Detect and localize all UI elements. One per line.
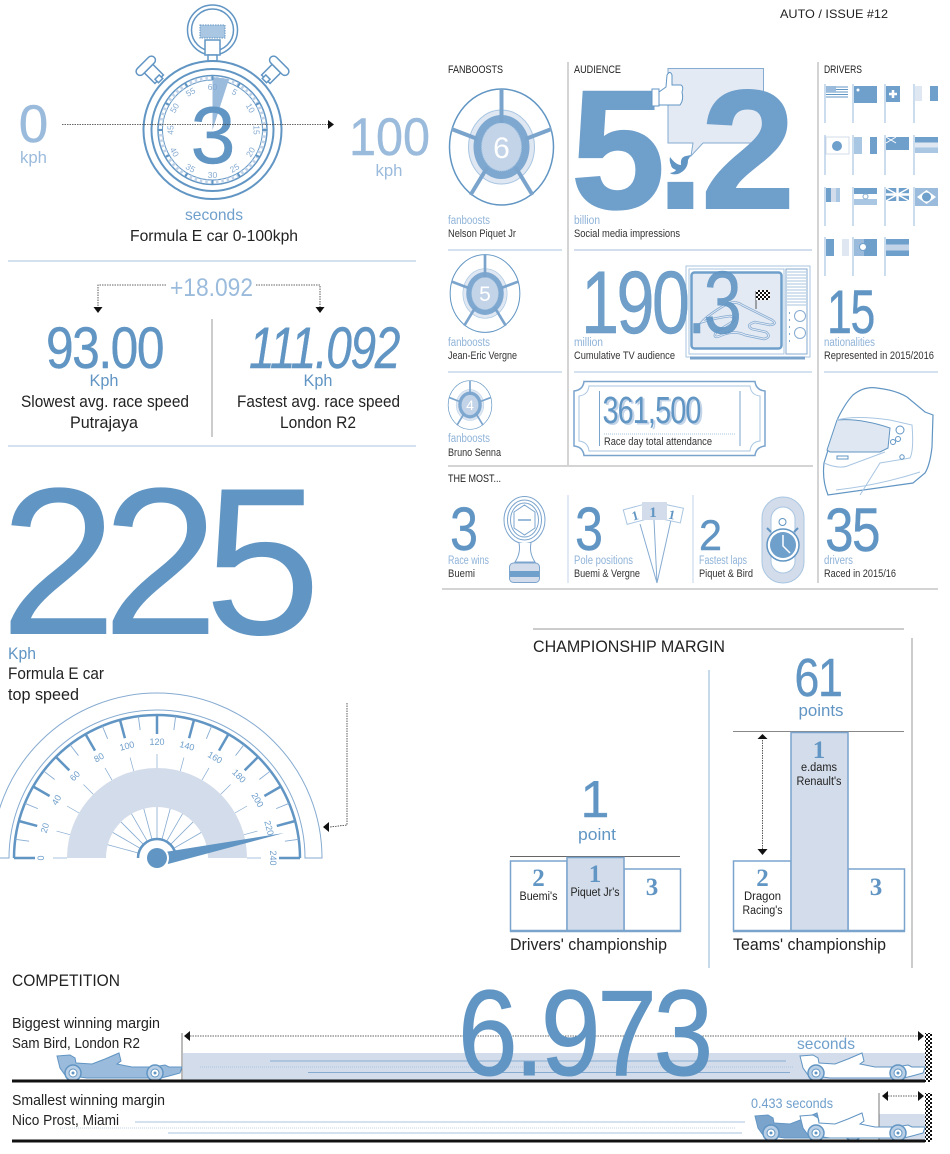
text: Nelson Piquet Jr: fanboosts <box>448 215 490 227</box>
speedometer: 100 <box>118 739 136 753</box>
speedometer: 200 <box>249 791 266 809</box>
end speed: kph <box>376 161 402 180</box>
speedometer: 80 <box>92 751 106 764</box>
TV audience number: 190.3 <box>581 252 739 352</box>
text: Nelson Piquet Jr: Nelson Piquet Jr <box>448 228 516 240</box>
text: Jean-Eric Vergne: Jean-Eric Vergne <box>448 350 517 362</box>
podium: drivers: 2 <box>532 865 545 892</box>
text: social media: Social media impressions <box>574 228 680 240</box>
stopwatch dial numbers: 30 <box>208 170 217 180</box>
pole positions: 3 <box>575 495 603 563</box>
icon: pole flags: 1 <box>667 506 677 523</box>
icon: pole flags: 1 <box>649 505 657 521</box>
top speed caption: Kph <box>8 644 36 663</box>
speedometer <box>0 693 322 870</box>
podium: teams <box>733 732 905 954</box>
ticket: race attendance: 361,500 <box>604 392 702 434</box>
social media number: 5.2 <box>571 55 795 244</box>
text: Jean-Eric Vergne: fanboosts <box>448 337 490 349</box>
podium: teams: Renault's <box>796 776 842 788</box>
icon: wheel Bruno Senna <box>448 381 492 429</box>
flag: France <box>826 239 849 256</box>
text: TV audience <box>574 337 675 362</box>
arrow: zero to hundred <box>62 120 334 129</box>
nationalities: 15 <box>827 278 874 346</box>
panel: race speed comparison <box>21 274 400 437</box>
flag: Japan <box>826 137 849 154</box>
podium: drivers: 1 <box>589 861 601 888</box>
drivers raced: Raced in 2015/16 <box>824 568 896 580</box>
race wins: Race wins <box>448 555 489 567</box>
podium: drivers: Piquet Jr's <box>570 887 620 899</box>
smallest margin label: 0.433 seconds <box>751 1095 833 1111</box>
panel: championship margin <box>510 629 912 968</box>
podium: teams: 1 <box>813 737 825 764</box>
heading: drivers: DRIVERS <box>824 64 862 76</box>
caption <box>130 207 298 245</box>
podium: teams: Racing's <box>742 905 783 917</box>
icon: trophy <box>504 496 545 582</box>
icon: television <box>686 266 810 360</box>
teams margin: points <box>798 701 844 720</box>
ticket: race attendance: 361,500 <box>602 390 700 432</box>
heading: the most: THE MOST... <box>448 473 501 485</box>
fastest race speed: Fastest avg. race speed <box>237 393 400 411</box>
speedometer: 220 <box>262 819 276 837</box>
flag: United Kingdom <box>886 188 909 201</box>
drivers raced: drivers <box>824 555 853 567</box>
speedometer: 120 <box>149 737 165 747</box>
heading: competition: COMPETITION <box>12 972 120 990</box>
podium: drivers: Buemi's <box>520 891 558 903</box>
nationalities: nationalities <box>824 337 875 349</box>
stopwatch dial numbers: 25 <box>228 161 241 175</box>
icon: car white <box>800 1113 925 1141</box>
end speed: 100 <box>349 108 430 167</box>
speedometer: 180 <box>230 767 248 785</box>
flag: Switzerland <box>886 86 900 102</box>
top speed caption: Formula E car <box>8 665 104 683</box>
stopwatch dial numbers: 60 <box>208 82 217 92</box>
text: Bruno Senna: Bruno Senna <box>448 447 502 459</box>
icon: wheel Nelson Piquet Jr <box>450 89 554 205</box>
text: Bruno Senna <box>448 433 502 459</box>
fastest race speed <box>237 316 400 432</box>
track: biggest margin <box>182 1031 932 1082</box>
stopwatch dial numbers: 15 <box>252 125 262 135</box>
ticket: race attendance <box>574 382 765 456</box>
text: biggest margin: Biggest winning margin <box>12 1016 160 1032</box>
icon: speech bubble <box>668 68 764 156</box>
start speed: kph <box>20 148 47 167</box>
heading: audience: AUDIENCE <box>574 64 621 76</box>
stopwatch dial numbers: 35 <box>184 161 197 175</box>
drivers raced: 35 <box>825 496 879 564</box>
flag: Brazil <box>915 188 938 206</box>
icon: thumbs up <box>652 72 683 106</box>
flag: India <box>854 188 877 205</box>
podium: teams: e.dams <box>801 762 837 774</box>
panel: competition <box>12 965 932 1142</box>
speed difference: +18.092 <box>170 274 253 302</box>
flag: Portugal <box>854 239 877 256</box>
stopwatch seconds value: 3 <box>190 91 236 181</box>
top speed caption <box>8 644 104 704</box>
flag: China <box>854 86 877 103</box>
slowest race speed: Slowest avg. race speed <box>21 393 189 411</box>
text: TV audience: Cumulative TV audience <box>574 350 675 362</box>
stopwatch dial numbers: 20 <box>244 145 257 159</box>
track: smallest margin <box>60 1091 932 1142</box>
slowest race speed: Kph <box>90 371 118 390</box>
flag: USA <box>826 86 848 99</box>
podium: drivers: Drivers' championship <box>510 936 667 954</box>
panel: the most <box>448 473 804 583</box>
slowest race speed: Putrajaya <box>70 414 139 432</box>
teams margin: 61 <box>794 648 842 708</box>
stopwatch dial numbers: 5 <box>230 86 239 98</box>
stopwatch dial numbers: 45 <box>166 125 176 135</box>
panel: drivers <box>824 64 938 580</box>
fastest laps: 2 <box>699 512 722 560</box>
text: social media: billion <box>574 215 600 227</box>
flag: Italy <box>915 86 938 101</box>
slowest race speed <box>21 316 189 432</box>
speedometer: 0 <box>36 855 46 861</box>
pole positions: Pole positions <box>574 555 633 567</box>
flag: Netherlands <box>886 239 909 256</box>
text: biggest margin: Sam Bird, London R2 <box>12 1036 140 1052</box>
nationalities: Represented in 2015/2016 <box>824 350 934 362</box>
drivers margin: point <box>578 825 616 844</box>
ticket: race attendance: Race day total attendance <box>604 436 712 448</box>
caption: seconds <box>185 207 243 224</box>
stopwatch dial numbers: 50 <box>168 101 181 115</box>
icon: stopwatch <box>134 5 291 199</box>
nationalities <box>824 278 934 362</box>
podium: drivers <box>510 856 681 954</box>
fastest laps: Fastest laps <box>699 555 747 567</box>
speedometer: 160 <box>206 749 224 766</box>
icon: car blue <box>57 1053 182 1081</box>
podium: drivers: 3 <box>646 874 658 901</box>
icon: pole flags: 1 <box>630 507 640 524</box>
fastest laps <box>699 512 753 580</box>
arrow: to slowest <box>94 285 166 313</box>
caption: Formula E car 0-100kph <box>130 228 298 245</box>
icon: wheel Nelson Piquet Jr: 6 <box>493 132 510 165</box>
text: Nelson Piquet Jr <box>448 215 516 240</box>
race wins <box>448 495 489 580</box>
panel: fanboosts <box>448 64 562 459</box>
arrow: teams margin <box>758 734 768 855</box>
icon: helmet <box>824 388 933 495</box>
podium: teams: 3 <box>870 874 882 901</box>
flag poles <box>825 84 914 276</box>
icon: wheel Jean-Eric Vergne <box>450 255 520 332</box>
podium: teams: Teams' championship <box>733 936 886 954</box>
icon: car dark <box>755 1113 880 1141</box>
icon: track and stopwatch <box>762 497 804 583</box>
top speed caption: top speed <box>8 686 79 704</box>
biggest margin number: 6.973 <box>458 965 710 1101</box>
text: biggest margin <box>12 1016 160 1052</box>
icon: car white <box>800 1053 925 1081</box>
stopwatch dial numbers: 40 <box>168 145 181 159</box>
slowest race speed: 93.00 <box>46 316 163 381</box>
flag: Belgium <box>826 188 840 202</box>
flag: Australia <box>886 137 909 150</box>
speedometer: 140 <box>178 739 196 753</box>
heading: fanboosts: FANBOOSTS <box>448 64 503 76</box>
drivers margin <box>578 771 616 844</box>
start speed: 0 <box>19 95 48 154</box>
podium: teams: Dragon <box>744 891 781 903</box>
icon: twitter bird <box>670 155 691 174</box>
fastest race speed: Kph <box>304 371 332 390</box>
text: smallest margin: Nico Prost, Miami <box>12 1113 119 1129</box>
text: social media <box>574 215 680 240</box>
seconds label: seconds <box>797 1036 855 1053</box>
arrow: to fastest <box>256 285 324 313</box>
stopwatch dial numbers: 10 <box>244 101 257 115</box>
stopwatch dial numbers <box>166 82 262 180</box>
speedometer: 20 <box>39 822 51 834</box>
race wins: Buemi <box>448 568 475 580</box>
text: Bruno Senna: fanboosts <box>448 433 490 445</box>
pole positions: Buemi & Vergne <box>574 568 640 580</box>
issue label: AUTO / ISSUE #12 <box>780 7 888 21</box>
panel: zero to 100 stopwatch <box>19 5 430 245</box>
stopwatch dial numbers: 55 <box>184 85 197 99</box>
fastest race speed: 111.092 <box>249 316 400 381</box>
text: smallest margin <box>12 1093 165 1129</box>
top speed number: 225 <box>0 444 312 679</box>
arrow: top speed pointer <box>323 703 347 832</box>
speedometer: 60 <box>68 769 82 783</box>
fastest race speed: London R2 <box>280 414 356 432</box>
race wins: 3 <box>450 495 478 563</box>
icon: wheel Bruno Senna: 4 <box>466 397 474 413</box>
text: TV audience: million <box>574 337 603 349</box>
icon: pole flags <box>623 502 683 583</box>
text: smallest margin: Smallest winning margin <box>12 1093 165 1109</box>
heading: championship margin: CHAMPIONSHIP MARGIN <box>533 638 725 656</box>
panel: top speed <box>0 444 347 870</box>
flag: Argentina <box>915 137 938 153</box>
panel: audience <box>571 55 812 456</box>
fastest laps: Piquet & Bird <box>699 568 753 580</box>
pole positions <box>574 495 640 580</box>
speedometer: 240 <box>268 850 278 866</box>
speedometer: 40 <box>50 793 63 807</box>
podium: teams: 2 <box>756 865 769 892</box>
text: Jean-Eric Vergne <box>448 337 517 362</box>
flag: France <box>854 137 877 154</box>
drivers margin: 1 <box>581 771 609 829</box>
icon: wheel Jean-Eric Vergne: 5 <box>479 283 491 306</box>
